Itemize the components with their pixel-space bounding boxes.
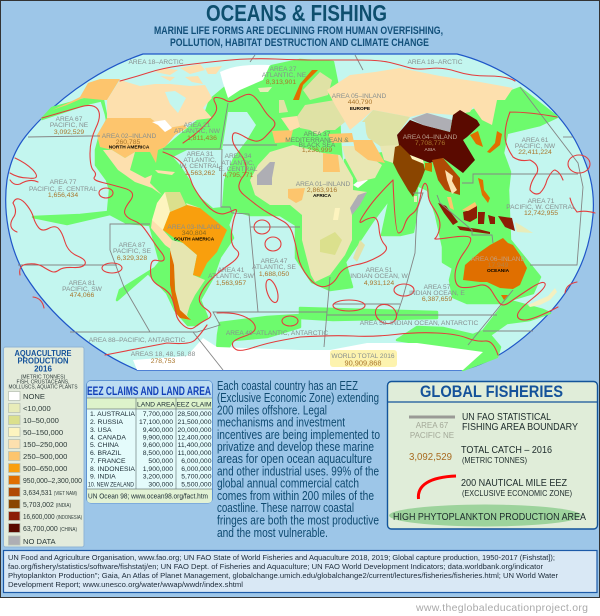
aquaculture heading: 2016 — [34, 364, 52, 374]
Area 21: AREA 21 — [184, 122, 211, 129]
Area 81: AREA 81 — [69, 280, 96, 287]
sources box — [4, 550, 597, 592]
Area 05 Europe — [332, 93, 387, 112]
Sumatra — [438, 203, 458, 225]
legend labels: 63,700,000 (CHINA) — [23, 524, 77, 533]
aquaculture subheading: FISH, CRUSTACEANS, — [17, 380, 69, 386]
subtitle: POLLUTION, HABITAT DESTRUCTION AND CLIMATE CHANGE — [170, 37, 429, 49]
Greenland — [220, 65, 270, 98]
legend labels: <10,000 — [23, 404, 51, 413]
EEZ table rows: 21,500,000 — [178, 419, 212, 426]
Area 87: 6,329,328 — [117, 255, 147, 262]
world total callout: 90,909,868 — [344, 358, 382, 368]
Area 27: AREA 27 — [270, 66, 297, 73]
subtitle — [154, 25, 443, 49]
Area 02 North America: NORTH AMERICA — [109, 144, 150, 150]
Area 81 — [62, 280, 103, 299]
Area 57: 6,387,659 — [422, 296, 452, 303]
Iran — [353, 140, 385, 163]
USA — [97, 118, 187, 163]
Area 51: INDIAN OCEAN, W — [350, 273, 409, 280]
Area 41 — [208, 267, 255, 287]
Area 47: 1,688,050 — [259, 271, 289, 278]
Area 57: AREA 57 — [424, 284, 451, 291]
legend labels: 16,600,000 (INDONESIA) — [23, 512, 82, 521]
Area 51: AREA 51 — [366, 267, 393, 274]
title: OCEANS & FISHING — [206, 0, 387, 26]
world total callout — [330, 350, 397, 368]
EEZ table rows: 9. INDIA — [90, 474, 116, 480]
legend labels: NONE — [23, 392, 45, 401]
Papua New Guinea — [515, 222, 533, 233]
Australia — [463, 238, 527, 289]
Area 58: AREA 58–INDIAN OCEAN, ANTARCTIC — [360, 320, 479, 327]
text block: EEZ explanation: and other industrial uses. 99% of the — [217, 464, 379, 478]
Area 06 Oceania: OCEANIA — [487, 268, 510, 274]
panel: global fisheries legend — [388, 382, 598, 529]
boundary legend item: AREA 67 — [416, 421, 449, 430]
Hudson Bay — [165, 91, 186, 113]
EEZ legend item — [418, 476, 572, 499]
world map — [6, 54, 595, 370]
aquaculture subheading: MOLLUSCS, AQUATIC PLANTS — [8, 384, 78, 390]
sources box: Phytoplankton Production"; Gaia, An Atlas of Planet Management, globalchange.umich.edu/globalchange2/current/lectures/fisheries/fisheries.html; UN World Water — [8, 571, 559, 580]
Area 06 Oceania: AREA 06–INLAND — [471, 256, 526, 263]
website credit: www.theglobaleducationproject.org — [415, 602, 588, 614]
Area 67: PACIFIC, NE — [50, 122, 89, 129]
EEZ table rows: 2. RUSSIA — [90, 419, 123, 426]
Area 34: 4,795,771 — [223, 172, 253, 179]
catch legend item — [409, 445, 552, 465]
EEZ table rows: 7,700,000 — [143, 411, 173, 418]
sources box: Development Report; www.unesco.org/water/wwap/wwdr/index.shtml — [8, 580, 243, 589]
Area 87: PACIFIC, SE — [113, 248, 152, 255]
Area 77: 1,656,434 — [48, 192, 78, 199]
Egypt — [323, 153, 340, 172]
Area 51 — [350, 267, 409, 287]
legend labels: 3,634,531 (VIET NAM) — [23, 488, 77, 497]
Area 71 — [506, 198, 576, 217]
Area 57: INDIAN OCEAN, E — [409, 290, 465, 297]
EEZ table rows: 9,900,000 — [143, 434, 173, 442]
Middle East — [342, 146, 382, 182]
Area 01 Africa: AFRICA — [313, 193, 332, 199]
Area 34 — [219, 153, 258, 179]
catch legend item: (METRIC TONNES) — [462, 456, 527, 465]
phytoplankton legend item — [389, 504, 586, 526]
world total callout: WORLD TOTAL 2016 — [331, 353, 395, 360]
Nigeria — [288, 188, 305, 203]
high phytoplankton areas — [33, 60, 557, 370]
Borneo — [463, 205, 477, 222]
Area 27: ATLANTIC, NE — [262, 72, 307, 79]
Brazil — [163, 205, 227, 277]
legend labels: 150–250,000 — [23, 440, 67, 449]
Turkey — [328, 133, 354, 143]
Area 34: E. CENTRAL — [219, 166, 258, 173]
boundary legend item: FISHING AREA BOUNDARY — [462, 422, 578, 433]
EEZ table rows: 6,000,000 — [181, 458, 212, 465]
Korea — [470, 131, 483, 147]
Venezuela — [165, 192, 186, 212]
Somalia — [350, 192, 367, 215]
Papua — [498, 216, 515, 231]
land masses — [52, 64, 557, 370]
text block: EEZ explanation: incentives are being implemented to — [217, 428, 380, 442]
Japan — [487, 131, 502, 153]
Russia — [327, 68, 513, 130]
subtitle: MARINE LIFE FORMS ARE DECLINING FROM HUMAN OVERFISHING, — [154, 25, 443, 37]
Norway — [293, 70, 318, 100]
EEZ table source: UN Ocean 98; www.ocean98.org/fact.htm — [88, 494, 208, 500]
Area 34: AREA 34 — [225, 153, 252, 160]
Antarctica — [133, 338, 483, 370]
EEZ table rows: 8. INDONESIA — [90, 466, 135, 473]
Java — [457, 226, 490, 234]
Area 31: 1,563,262 — [185, 170, 215, 177]
legend labels — [23, 392, 82, 546]
EEZ table rows: 11,000,000 — [178, 450, 212, 457]
panel: EEZ claims table — [86, 380, 212, 503]
EEZ table rows: 3. USA — [90, 427, 112, 434]
Area 31 — [180, 151, 220, 177]
EEZ table rows: 12,400,000 — [178, 434, 212, 442]
EEZ table rows: 1,900,000 — [143, 466, 173, 473]
text block: EEZ explanation: comes from within 200 miles of the — [217, 489, 374, 503]
Area 88: AREA 88–PACIFIC, ANTARCTIC — [89, 337, 185, 344]
legend labels: 50–150,000 — [23, 428, 63, 437]
Area 41: ATLANTIC, SW — [208, 273, 255, 280]
Area 37: BLACK SEA — [299, 142, 336, 149]
Area 01 Africa — [296, 181, 351, 199]
aquaculture heading: PRODUCTION — [18, 356, 69, 366]
Area 31: W. CENTRAL — [180, 163, 220, 170]
Area 03 South America — [167, 224, 221, 242]
EEZ table title: EEZ CLAIMS AND LAND AREA — [87, 386, 211, 398]
Area 37: 1,236,999 — [302, 147, 332, 154]
Area 57 — [409, 284, 465, 303]
Area 05 Europe: EUROPE — [350, 106, 371, 112]
Mongolia — [411, 113, 452, 132]
aquaculture heading: AQUACULTURE — [14, 349, 72, 358]
Area 31: AREA 31 — [187, 151, 214, 158]
legend labels: 250–500,000 — [23, 452, 67, 461]
Area 67: AREA 67 — [56, 116, 83, 123]
Area 18 Arctic west: AREA 18–ARCTIC — [129, 59, 184, 66]
EEZ table rows: 7. FRANCE — [90, 458, 126, 465]
Area 67 — [50, 116, 89, 136]
EEZ table headers: EEZ CLAIM — [176, 402, 212, 408]
Caribbean — [155, 170, 175, 175]
Areas 18 48 58 88: 278,753 — [151, 358, 175, 365]
Area 34: ATLANTIC, — [221, 160, 255, 167]
EEZ table headers — [137, 402, 212, 408]
text block: EEZ explanation: mechanisms and investment — [217, 416, 345, 430]
Mexico and Central America — [103, 150, 162, 195]
Area 87: AREA 87 — [119, 242, 146, 249]
Area 02 North America — [102, 133, 157, 150]
EEZ table rows: 4. CANADA — [90, 434, 126, 442]
Area 67: 3,092,529 — [54, 129, 84, 136]
Area 41: AREA 41 — [218, 267, 245, 274]
Canada — [107, 80, 212, 128]
Colombia — [152, 192, 175, 230]
Tasmania — [501, 295, 508, 300]
Area 71: 12,742,955 — [524, 210, 558, 217]
EEZ legend item: (EXCLUSIVE ECONOMIC ZONE) — [462, 489, 572, 498]
China — [397, 110, 480, 173]
Area 61: 22,411,224 — [518, 149, 552, 156]
Area 37: AREA 37 — [304, 131, 331, 138]
Southeast Asia — [432, 158, 460, 195]
EEZ table rows: 5,500,000 — [181, 482, 212, 488]
Area 77: PACIFIC, E. CENTRAL — [29, 186, 97, 193]
Areas 18 48 58 88 — [131, 351, 196, 365]
Guianas — [186, 203, 200, 212]
Area 21 — [174, 122, 221, 142]
legend labels: 5,703,002 (INDIA) — [23, 500, 71, 509]
Sulawesi and Moluccas — [478, 212, 495, 224]
Southern Africa olive — [320, 232, 342, 255]
legend labels: NO DATA — [23, 537, 57, 546]
text block: EEZ explanation: coastline. These narrow coastal — [217, 501, 354, 515]
Area 61 — [515, 137, 556, 156]
Area 61: PACIFIC, NW — [515, 143, 556, 150]
Area 77: AREA 77 — [50, 179, 77, 186]
EEZ table rows: 20,000,000 — [178, 427, 212, 434]
Argentina and Bolivia — [170, 240, 205, 320]
sources box: fao.org/fishery/statistics/software/fishstatj/en; UN FAO Dept. of Fisheries and Aquaculture; UN FAO World Development Indicators; data.worldbank.org/indicator — [8, 562, 544, 571]
text block: EEZ explanation: 200 miles offshore. Legal — [217, 404, 327, 418]
EEZ table rows: 1. AUSTRALIA — [90, 411, 135, 418]
legend labels: 10–50,000 — [23, 416, 59, 425]
France — [281, 116, 300, 131]
EEZ table rows: 9,600,000 — [143, 442, 173, 449]
Africa — [250, 145, 367, 282]
Peru — [151, 220, 172, 250]
Chile — [170, 250, 191, 320]
Nepal band — [410, 155, 424, 164]
Area 04 Asia: ASIA — [425, 147, 436, 153]
Area 71: PACIFIC, W. CENTRAL — [506, 204, 576, 211]
catch legend item: 3,092,529 — [409, 452, 452, 463]
Thailand — [445, 170, 457, 194]
EEZ table rows: 500,000 — [148, 458, 173, 465]
EEZ table rows — [88, 411, 212, 488]
Yemen coast — [353, 178, 368, 188]
panel: aquaculture production legend — [4, 347, 84, 547]
EEZ table rows: 300,000 — [148, 482, 173, 488]
Iceland — [258, 87, 272, 92]
Sri Lanka — [414, 196, 417, 202]
sources box: UN Food and Agriculture Organisation, www.fao.org; UN FAO State of World Fisheries and Aquaculture 2018, 2019; Global capture production, 1950-2017 (Fishstat]); — [8, 553, 555, 562]
Area 47 — [252, 258, 297, 278]
aquaculture subheading: (METRIC TONNES) — [21, 374, 66, 380]
Area 27 — [262, 66, 307, 86]
aquaculture heading — [14, 349, 72, 374]
legend labels: 500–650,000 — [23, 464, 67, 473]
text block: EEZ explanation: privatize and develop these marine — [217, 440, 374, 454]
Area 27: 8,313,901 — [266, 79, 296, 86]
Area 77 — [29, 179, 97, 199]
area labels — [29, 59, 576, 365]
text block: EEZ explanation: (Exclusive Economic Zone) extending — [217, 391, 379, 405]
Area 51: 4,931,124 — [364, 280, 394, 287]
Area 03 South America: 340,804 — [182, 230, 206, 237]
EEZ table rows: 17,100,000 — [139, 419, 173, 426]
text block: EEZ explanation — [217, 379, 380, 540]
Pakistan and Afghanistan — [380, 145, 398, 163]
legend labels: 950,000–2,300,000 — [23, 476, 82, 485]
text block: EEZ explanation: global annual commercial catch — [217, 476, 359, 490]
Area 37 — [285, 131, 349, 154]
boundary legend item: UN FAO STATISTICAL — [462, 412, 551, 423]
boundary legend item — [409, 412, 578, 440]
Arctic islands — [155, 64, 222, 84]
Area 04 Asia: 7,708,776 — [415, 140, 445, 147]
Lake region — [333, 208, 340, 220]
Madagascar — [353, 240, 365, 262]
Area 61: AREA 61 — [522, 137, 549, 144]
Spain — [272, 130, 293, 143]
Malaysia — [447, 197, 454, 210]
Area 05 Europe: AREA 05–INLAND — [332, 93, 387, 100]
Area 03 South America: SOUTH AMERICA — [174, 236, 215, 242]
Europe — [296, 100, 345, 135]
EEZ table rows: 11,400,000 — [178, 442, 212, 449]
Area 04 Asia: AREA 04–INLAND — [403, 134, 458, 141]
Area 06 Oceania: 17,949 — [488, 262, 509, 269]
Area 21: 1,811,436 — [187, 135, 217, 142]
Area 31: ATLANTIC, — [183, 157, 217, 164]
Sarawak — [462, 202, 477, 211]
EEZ table rows: 6. BRAZIL — [90, 450, 122, 457]
Area 48: AREA 48–ATLANTIC, ANTARCTIC — [226, 330, 328, 337]
legend swatches — [8, 392, 20, 545]
EEZ table rows: 5,700,000 — [181, 474, 212, 480]
aquaculture subheading — [8, 374, 78, 390]
EEZ table rows: 8,500,000 — [143, 450, 173, 457]
Alaska — [52, 79, 120, 110]
Area 41: 1,563,957 — [216, 280, 246, 287]
Area 37: MEDITERRANEAN & — [285, 137, 349, 144]
EEZ table rows: 3,200,000 — [143, 474, 173, 480]
text block: EEZ explanation: Each coastal country has an EEZ — [217, 379, 358, 393]
Area 81: PACIFIC, SW — [62, 286, 103, 293]
Area 02 North America: 260,785 — [116, 139, 140, 146]
EEZ table rows: 5. CHINA — [90, 442, 119, 449]
Area 81: 474,066 — [70, 292, 94, 299]
text block: EEZ explanation: fringes are both the most productive — [217, 514, 379, 528]
EEZ table headers: LAND AREA — [137, 402, 175, 408]
Area 47: ATLANTIC, SE — [252, 264, 297, 271]
Caspian Sea — [359, 122, 367, 140]
EEZ boundary lines — [10, 59, 595, 355]
Philippines — [478, 178, 490, 203]
open ocean holes — [173, 112, 256, 208]
Area 71: AREA 71 — [528, 198, 555, 205]
Area 47: AREA 47 — [261, 258, 288, 265]
Area 05 Europe: 440,790 — [348, 99, 372, 106]
Area 04 Asia — [403, 134, 458, 153]
Area 87 — [113, 242, 152, 262]
Sweden and Finland — [303, 72, 332, 100]
Area 06 Oceania — [471, 256, 526, 274]
UK — [279, 100, 288, 113]
Area 21: ATLANTIC, NW — [174, 128, 221, 135]
New Zealand — [528, 288, 557, 307]
EEZ table rows: 9,400,000 — [143, 427, 173, 434]
fishing area boundaries — [18, 55, 583, 370]
EEZ legend item: 200 NAUTICAL MILE EEZ — [461, 478, 567, 489]
Western Sahara — [257, 162, 275, 185]
Bhutan and Bangladesh — [425, 163, 432, 172]
Area 01 Africa: 2,863,916 — [307, 187, 337, 194]
Area 01 Africa: AREA 01–INLAND — [296, 181, 351, 188]
text block: EEZ explanation: areas for open ocean aquaculture — [217, 452, 372, 466]
India — [393, 145, 425, 197]
boundary legend item: PACIFIC NE — [410, 431, 454, 440]
Central Asia — [362, 110, 410, 150]
Area 03 South America: AREA 03-INLAND — [167, 224, 221, 231]
EEZ table rows: 10. NEW ZEALAND — [88, 482, 134, 488]
catch legend item: TOTAL CATCH – 2016 — [461, 445, 552, 456]
global fisheries heading: GLOBAL FISHERIES — [420, 382, 563, 401]
EEZ table rows: 28,500,000 — [178, 411, 212, 418]
Area 18 Arctic east: AREA 18–ARCTIC — [408, 59, 463, 66]
Great Lakes — [152, 120, 172, 132]
Areas 18 48 58 88: AREAS 18, 48, 58, 88 — [131, 351, 196, 358]
Area 02 North America: AREA 02–INLAND — [102, 133, 157, 140]
text block: EEZ explanation: and the most vulnerable. — [217, 526, 328, 540]
EEZ table rows: 6,000,000 — [181, 466, 212, 473]
